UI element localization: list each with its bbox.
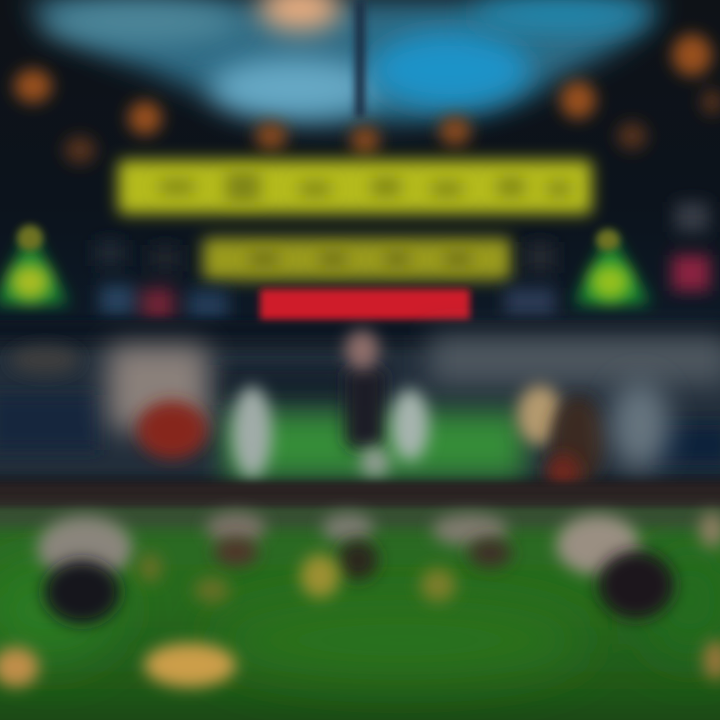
ball centre right [432,514,512,568]
grass highlights [0,540,720,680]
tan pad centre [144,643,236,687]
brown rail [0,482,720,508]
small scoreboard tiles [95,202,710,320]
tan pad right [703,640,720,680]
player: central figure [345,330,390,477]
crowd band [0,335,720,480]
ball right [556,515,674,619]
ball centre left [206,512,266,566]
grey haze below rail [0,508,720,526]
background stands [0,0,720,340]
ball left [37,516,133,624]
sky [25,0,660,123]
main heading sign [118,160,592,214]
tan pad left [0,647,39,687]
player: left pale figure [108,345,208,459]
yellow markers [138,553,456,603]
grass field [0,506,720,720]
ball centre [322,513,378,580]
red banner [260,289,470,325]
pitch [225,412,525,478]
dark divider band [0,320,720,342]
player: right figure [517,380,670,490]
stadium lights [14,34,720,164]
icon: left green emblem [0,225,68,304]
player: white figure right [391,389,429,461]
balls row [37,512,720,624]
player: white figure [232,386,272,478]
icon: right green emblem [574,229,650,304]
subheading sign [203,238,511,280]
